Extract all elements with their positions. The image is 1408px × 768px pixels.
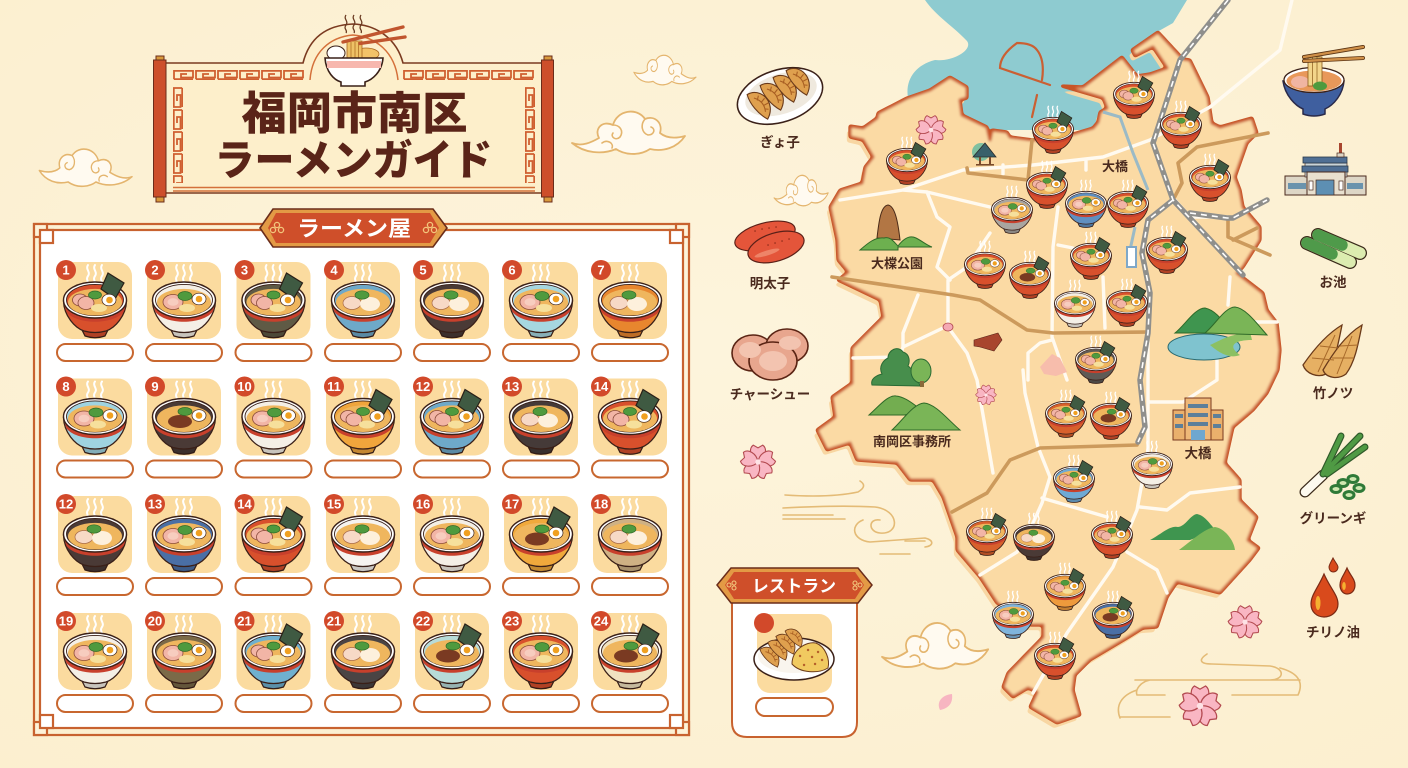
canal — [1103, 112, 1148, 250]
ramen card 23: 23 — [505, 614, 519, 628]
ramen card 17: 17 — [505, 496, 519, 512]
map label: 南岡区事務所: 南岡区事務所 — [873, 434, 951, 449]
icon: pink district — [1040, 354, 1067, 376]
marker — [1045, 563, 1085, 611]
ramen card 16: 16 — [416, 496, 430, 512]
ramen card 4 — [324, 260, 401, 361]
ramen card 13 (third row): 13 — [148, 496, 162, 512]
ramen card 20: 20 — [148, 614, 162, 628]
icon: hills south east — [1150, 514, 1235, 550]
ramen card 16 — [413, 494, 490, 595]
food legend right — [1283, 47, 1366, 640]
ramen card 14: 14 — [594, 379, 609, 394]
label: チャーシュー: チャーシュー — [730, 387, 810, 402]
ramen card 9 — [145, 376, 222, 478]
map label: 大橋 south: 大橋 — [1184, 445, 1212, 461]
ramen card 14 (third row) — [234, 494, 312, 595]
name pill — [756, 698, 833, 716]
marker — [967, 508, 1007, 556]
ramen card 3: 3 — [241, 262, 248, 278]
marker — [1014, 513, 1054, 561]
map label: 大橋 north: 大橋 — [1102, 159, 1128, 174]
ramen card 23 — [502, 611, 579, 712]
number badge (empty) — [754, 613, 774, 633]
map ramen markers — [887, 71, 1230, 680]
icon: government building — [1285, 143, 1366, 195]
marker — [965, 241, 1005, 289]
label: グリーンギ: グリーンギ — [1300, 510, 1366, 526]
heading banner: ラーメン屋 — [260, 209, 447, 247]
marker — [1093, 591, 1133, 639]
marker — [1107, 279, 1147, 327]
icon: trees — [872, 349, 931, 387]
heading banner: レストラン — [717, 568, 872, 603]
plaque scroll body with arch — [165, 24, 542, 193]
title text: 福岡市南区 — [242, 88, 468, 139]
ramen card 21 (second) — [324, 611, 401, 712]
station marker — [1127, 247, 1136, 267]
icon: cherry petal on road — [943, 323, 953, 331]
marker — [887, 137, 927, 185]
marker — [1046, 390, 1086, 438]
icon: gyoza and fried rice plate — [754, 625, 834, 680]
ramen card 22: 22 — [416, 614, 430, 628]
ramen card 24 — [591, 611, 668, 712]
icon: title ramen bowl — [325, 15, 405, 86]
ramen card 2 — [145, 260, 222, 361]
ramen card 10 — [234, 376, 312, 478]
label: ぎょ子: ぎょ子 — [760, 134, 800, 150]
ramen card 21 (second): 21 — [327, 614, 341, 628]
ramen card 11: 11 — [327, 379, 341, 394]
marker — [1066, 180, 1106, 228]
marker — [1055, 280, 1095, 328]
ramen card 12 — [413, 376, 490, 478]
land shadow — [814, 37, 1277, 728]
icon: green onion — [1305, 436, 1365, 498]
tan roads — [832, 133, 1270, 512]
icon: hills west — [869, 396, 960, 430]
ramen card 8: 8 — [62, 379, 70, 394]
decorative sakura — [740, 116, 1263, 727]
marker — [993, 591, 1033, 639]
marker — [1054, 455, 1094, 503]
heading banner: レストラン: レストラン — [752, 577, 836, 596]
restaurant food tile — [757, 614, 832, 693]
ramen card 7: 7 — [597, 262, 605, 278]
marker — [1076, 336, 1116, 384]
decorative clouds near map — [774, 175, 988, 669]
ramen card 12 (third row): 12 — [59, 496, 73, 512]
marker — [1108, 180, 1148, 228]
island outline — [1000, 43, 1050, 117]
marker — [1033, 106, 1073, 154]
ramen card 19: 19 — [59, 614, 73, 628]
icon: green stalks — [1307, 235, 1360, 262]
map label: 大橖公園: 大橖公園 — [871, 256, 923, 271]
icon: shrine — [972, 143, 996, 166]
marker — [1035, 632, 1075, 680]
expressways — [1138, 0, 1267, 442]
marker — [1092, 511, 1132, 559]
title plaque: ラーメンガイド — [214, 137, 492, 184]
ramen card 11 — [324, 376, 401, 478]
ramen card 6 — [502, 260, 579, 361]
ramen card 1: 1 — [62, 262, 70, 278]
icon: hills and lake east — [1168, 307, 1267, 360]
ramen card 24: 24 — [594, 614, 609, 628]
label: チリノ油: チリノ油 — [1306, 625, 1360, 640]
marker — [1161, 101, 1201, 149]
ramen card 13: 13 — [505, 379, 519, 394]
restaurant card outline — [732, 600, 857, 737]
ramen card 17 — [502, 494, 579, 595]
panel frame — [34, 224, 689, 735]
land fill and coastline — [817, 32, 1280, 723]
ramen card 21 — [234, 611, 312, 712]
ramen card 15: 15 — [327, 496, 341, 512]
roads — [840, 0, 1292, 693]
ramen card 7 — [591, 260, 668, 361]
ramen card 18 — [591, 494, 668, 595]
ramen card 1 — [56, 260, 133, 361]
sea — [907, 0, 1187, 130]
ramen card 13 (third row) — [145, 494, 222, 595]
marker — [992, 186, 1032, 234]
icon: mentaiko — [732, 215, 808, 269]
ramen card 5: 5 — [419, 262, 427, 278]
icon: gyoza plate — [730, 58, 830, 134]
marker — [1027, 161, 1067, 209]
scroll rods — [154, 56, 554, 202]
ramen card 14 (third row): 14 — [237, 496, 252, 512]
ramen card 2: 2 — [151, 262, 159, 278]
ramen card 10: 10 — [237, 379, 252, 394]
ramen card 20 — [145, 611, 222, 712]
icon: bamboo shoots — [1303, 325, 1362, 377]
food legend left — [730, 58, 830, 402]
marker — [1190, 154, 1230, 202]
label: 明太子: 明太子 — [750, 276, 790, 291]
icon: chili oil drops — [1311, 558, 1355, 617]
marker — [1114, 71, 1154, 119]
ramen card 8 — [56, 376, 133, 478]
icon: chashu slices — [732, 329, 808, 380]
ramen card 22 — [413, 611, 490, 712]
marker — [1010, 251, 1050, 299]
marker — [1132, 441, 1172, 489]
ramen card 12: 12 — [416, 379, 430, 394]
panel: ramen shops — [34, 209, 689, 735]
ramen card 15 — [324, 494, 401, 595]
ramen card 19 — [56, 611, 133, 712]
inner arch and bottom rule — [173, 35, 535, 191]
icon: red building block — [974, 333, 1002, 351]
marker — [1071, 232, 1111, 280]
ramen card 6: 6 — [508, 262, 516, 278]
ramen card 18: 18 — [594, 496, 608, 512]
marker — [1147, 226, 1187, 274]
decorative wave lines — [783, 481, 1300, 718]
icon: office building — [1173, 398, 1223, 440]
ramen card 4: 4 — [330, 262, 338, 278]
ramen card 5 — [413, 260, 490, 361]
ramen card 14 — [591, 376, 668, 478]
ramen card 12 (third row) — [56, 494, 133, 595]
ramen card 3 — [234, 260, 312, 361]
top meander border — [173, 70, 535, 183]
panel: restaurant — [717, 568, 872, 737]
icon: park rock and hills — [860, 205, 932, 250]
marker — [1091, 392, 1131, 440]
heading banner: ラーメン屋: ラーメン屋 — [297, 217, 411, 241]
ramen card 21: 21 — [237, 614, 252, 628]
icon: blue ramen bowl with chopsticks — [1283, 47, 1363, 116]
decorative clouds: upper left area — [39, 55, 696, 186]
map — [814, 0, 1292, 728]
ramen card 9: 9 — [151, 379, 159, 394]
ramen card 13 — [502, 376, 579, 478]
label: お池: お池 — [1320, 275, 1347, 290]
label: 竹ノツ: 竹ノツ — [1313, 385, 1353, 401]
title plaque — [154, 15, 554, 202]
